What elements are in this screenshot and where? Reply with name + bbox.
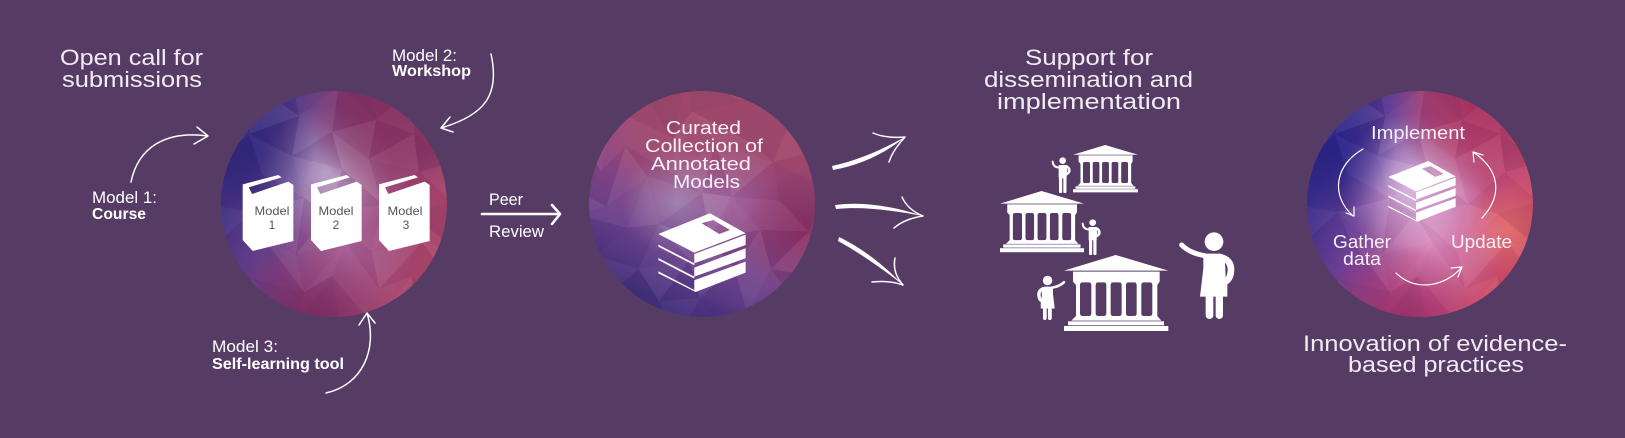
heading: open call for submissions: submissions <box>62 67 202 92</box>
heading: support for dissemination and implementation: implementation <box>997 89 1181 114</box>
label: peer review arrow <box>482 190 560 241</box>
heading: open call for submissions <box>60 45 203 92</box>
heading: open call for submissions: Open call for <box>60 45 203 70</box>
heading: support for dissemination and implementation: Support for <box>1025 45 1153 70</box>
icon: stack of books in cycle <box>1388 161 1456 222</box>
arrow: implement to gather data <box>1338 149 1363 216</box>
text: curated collection of annotated models: Collection of <box>645 135 764 156</box>
panel: models circle <box>221 91 447 317</box>
label: peer review arrow: Peer <box>489 190 523 209</box>
text: curated collection of annotated models <box>645 117 764 192</box>
text: implement: Implement <box>1371 122 1465 143</box>
arrow: model 3 to circle <box>326 313 375 393</box>
icon: large institution <box>1064 255 1168 331</box>
heading: innovation of evidence-based practices: based practices <box>1348 352 1524 377</box>
icon: book model 3: Model <box>388 204 422 218</box>
label: model 2 workshop: Workshop <box>392 63 471 80</box>
label: model 1 course <box>92 188 157 223</box>
icon: person by top institution <box>1053 157 1071 193</box>
text: curated collection of annotated models: Curated <box>666 117 741 138</box>
arrow: update to implement <box>1473 152 1496 218</box>
arrow: middle dissemination <box>835 197 923 228</box>
arrow: model 2 to circle <box>441 54 493 132</box>
panel: curated collection circle <box>589 91 815 317</box>
label: model 1 course: Model 1: <box>92 188 157 207</box>
icon: large woman <box>1182 232 1234 319</box>
icon: medium institution <box>1000 191 1084 252</box>
arrow: upper dissemination <box>832 133 905 170</box>
icon: small institution top <box>1073 145 1138 192</box>
icon: small woman <box>1037 276 1064 320</box>
label: model 1 course: Course <box>92 206 146 223</box>
label: model 3 self-learning tool: Model 3: <box>212 337 278 356</box>
arrow: gather data to update <box>1396 267 1462 285</box>
label: model 2 workshop: Model 2: <box>392 46 457 65</box>
heading: support for dissemination and implementation <box>984 45 1193 114</box>
arrow: model 1 to circle <box>131 127 208 182</box>
text: update: Update <box>1451 231 1512 252</box>
icon: book model 3: 3 <box>403 218 410 232</box>
label: peer review arrow: Review <box>489 222 545 241</box>
icon: book model 1: 1 <box>269 218 276 232</box>
heading: innovation of evidence-based practices: Innovation of evidence- <box>1303 331 1567 356</box>
icon: person by medium institution <box>1083 219 1101 255</box>
label: model 3 self-learning tool: Self-learning tool <box>212 356 344 373</box>
arrow: lower dissemination <box>838 237 903 285</box>
text: gather data: Gather <box>1333 231 1391 252</box>
icon: book model 2: Model <box>318 204 354 218</box>
icon: book model 3 <box>379 175 430 251</box>
heading: support for dissemination and implementation: dissemination and <box>984 67 1193 92</box>
text: curated collection of annotated models: Models <box>673 171 740 192</box>
label: model 3 self-learning tool <box>212 337 344 373</box>
text: curated collection of annotated models: Annotated <box>651 153 751 174</box>
text: gather data <box>1333 231 1391 269</box>
icon: book model 1 <box>243 175 293 251</box>
panel: innovation cycle circle <box>1307 91 1533 317</box>
icon: book model 1: Model <box>254 204 290 218</box>
text: gather data: data <box>1343 248 1382 269</box>
heading: innovation of evidence-based practices <box>1303 331 1567 377</box>
icon: stack of books <box>658 213 746 292</box>
label: model 2 workshop <box>392 46 471 80</box>
icon: book model 2: 2 <box>333 218 340 232</box>
icon: book model 2 <box>311 175 362 251</box>
